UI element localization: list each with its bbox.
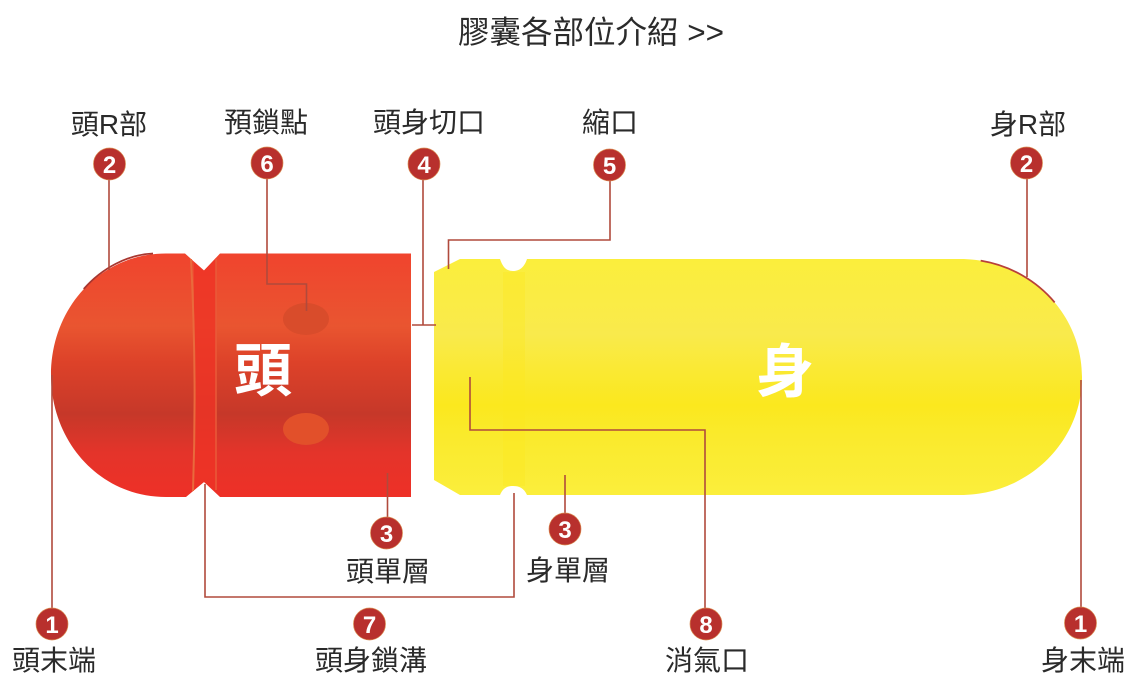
badge 2 left: 2	[103, 152, 116, 179]
badge 5	[594, 149, 626, 181]
badge 1 left: 1	[45, 612, 59, 639]
badge 3 head	[370, 517, 402, 549]
body character: 身	[756, 340, 814, 405]
label: body R: 身R部	[990, 109, 1066, 140]
badge 6: 6	[260, 151, 274, 178]
leader: lock groove	[205, 484, 514, 597]
badge 1 right	[1064, 607, 1096, 639]
badge 8: 8	[699, 612, 713, 639]
leader: head body cut	[412, 170, 436, 325]
label: neck: 縮口	[582, 107, 638, 138]
label: head R: 頭R部	[71, 109, 147, 140]
title: 膠囊各部位介紹 >>	[458, 14, 724, 50]
leader: body R	[1026, 170, 1028, 277]
badge 7	[354, 608, 386, 640]
label: vent: 消氣口	[665, 645, 749, 676]
badge 6	[251, 147, 283, 179]
leader: body end	[1080, 380, 1082, 620]
badge 1 left	[36, 608, 68, 640]
leader: neck	[448, 170, 610, 269]
head character: 頭	[234, 339, 292, 404]
leader: pre-lock point	[267, 170, 306, 311]
badge 2 right: 2	[1020, 151, 1033, 178]
leader: head end	[51, 375, 53, 620]
label: head end: 頭末端	[12, 645, 96, 676]
badge 2 left	[94, 148, 126, 180]
leader: head single layer	[386, 473, 388, 530]
badge 4: 4	[417, 152, 431, 179]
badge 3 body	[549, 513, 581, 545]
capsule head	[51, 254, 411, 497]
body lock groove band	[503, 272, 525, 486]
pre-lock dent upper	[283, 303, 329, 335]
badge 1 right: 1	[1074, 611, 1087, 638]
badge 2 right	[1010, 147, 1042, 179]
label: lock groove: 頭身鎖溝	[315, 645, 427, 676]
leader: vent	[470, 377, 705, 620]
leader: body single layer	[564, 475, 566, 530]
label: head single layer: 頭單層	[346, 556, 430, 587]
leader: head R	[108, 170, 110, 270]
label: body single layer: 身單層	[526, 555, 610, 586]
badge 7: 7	[363, 612, 376, 639]
head R edge	[84, 254, 153, 289]
label: body end: 身末端	[1041, 645, 1125, 676]
body R edge	[960, 259, 1082, 377]
pre-lock dent lower	[283, 413, 329, 445]
badge 3 body: 3	[558, 517, 572, 544]
badge 3 head: 3	[380, 521, 393, 548]
badge 4	[408, 148, 440, 180]
head lock groove band	[194, 258, 216, 492]
label: pre-lock point: 預鎖點	[224, 107, 308, 138]
badge 5: 5	[603, 153, 616, 180]
capsule body	[434, 259, 1082, 495]
badge 8	[690, 608, 722, 640]
label: head body cut: 頭身切口	[373, 107, 485, 138]
